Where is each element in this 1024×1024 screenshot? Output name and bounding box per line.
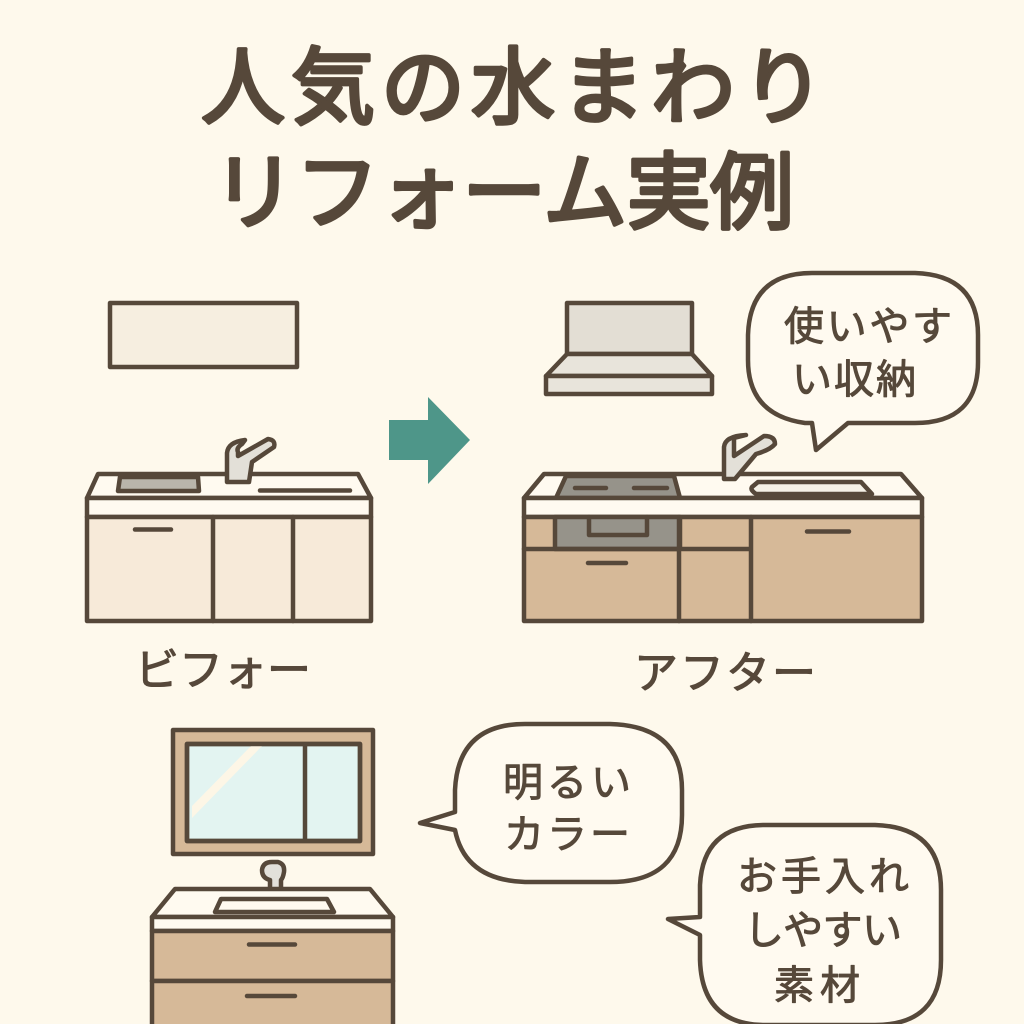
panel: after kitchen: [524, 303, 922, 621]
counter front: [152, 917, 393, 931]
counter slot: [260, 488, 350, 493]
faucet: [724, 435, 775, 479]
panel: before kitchen: [87, 303, 371, 621]
label: after: アフター: [634, 649, 816, 698]
faucet: [227, 439, 274, 482]
callout: storage: い収納: [792, 358, 916, 402]
callout: easy care material: 素材: [774, 964, 860, 1008]
cabinet doors: [87, 517, 371, 621]
counter top: [524, 474, 922, 498]
callout: easy care material: [668, 825, 941, 1024]
cooktop: [556, 476, 680, 498]
counter front: [524, 498, 922, 517]
range hood: [546, 303, 712, 394]
sink: [752, 482, 872, 494]
counter front: [87, 498, 371, 517]
faucet: [262, 862, 284, 889]
counter top: [152, 889, 393, 917]
drawers: [152, 931, 393, 1024]
door handle: [135, 527, 171, 532]
arrow: [389, 397, 470, 484]
cabinet body: [524, 517, 922, 621]
title: リフォーム実例: [212, 146, 794, 240]
callout: bright colour: 明るい: [503, 761, 631, 805]
handles: [588, 532, 849, 563]
callout: easy care material: しやすい: [744, 909, 902, 953]
callout: bright colour: カラー: [504, 813, 630, 857]
mirror: [173, 730, 373, 854]
callout: storage: 使いやす: [784, 305, 952, 349]
basin: [215, 899, 334, 912]
oven: [555, 517, 680, 549]
title: 人気の水まわり: [201, 41, 825, 135]
counter top: [87, 474, 371, 498]
sink: [118, 477, 199, 491]
wall cabinet: [110, 303, 297, 367]
panel: washbasin: [152, 730, 393, 1024]
callout: storage: [748, 273, 978, 450]
title: [201, 41, 825, 240]
cabinet dividers: [524, 517, 751, 621]
callout: easy care material: お手入れ: [737, 855, 909, 899]
callout: bright colour: [420, 724, 682, 882]
label: before: ビフォー: [135, 646, 311, 695]
